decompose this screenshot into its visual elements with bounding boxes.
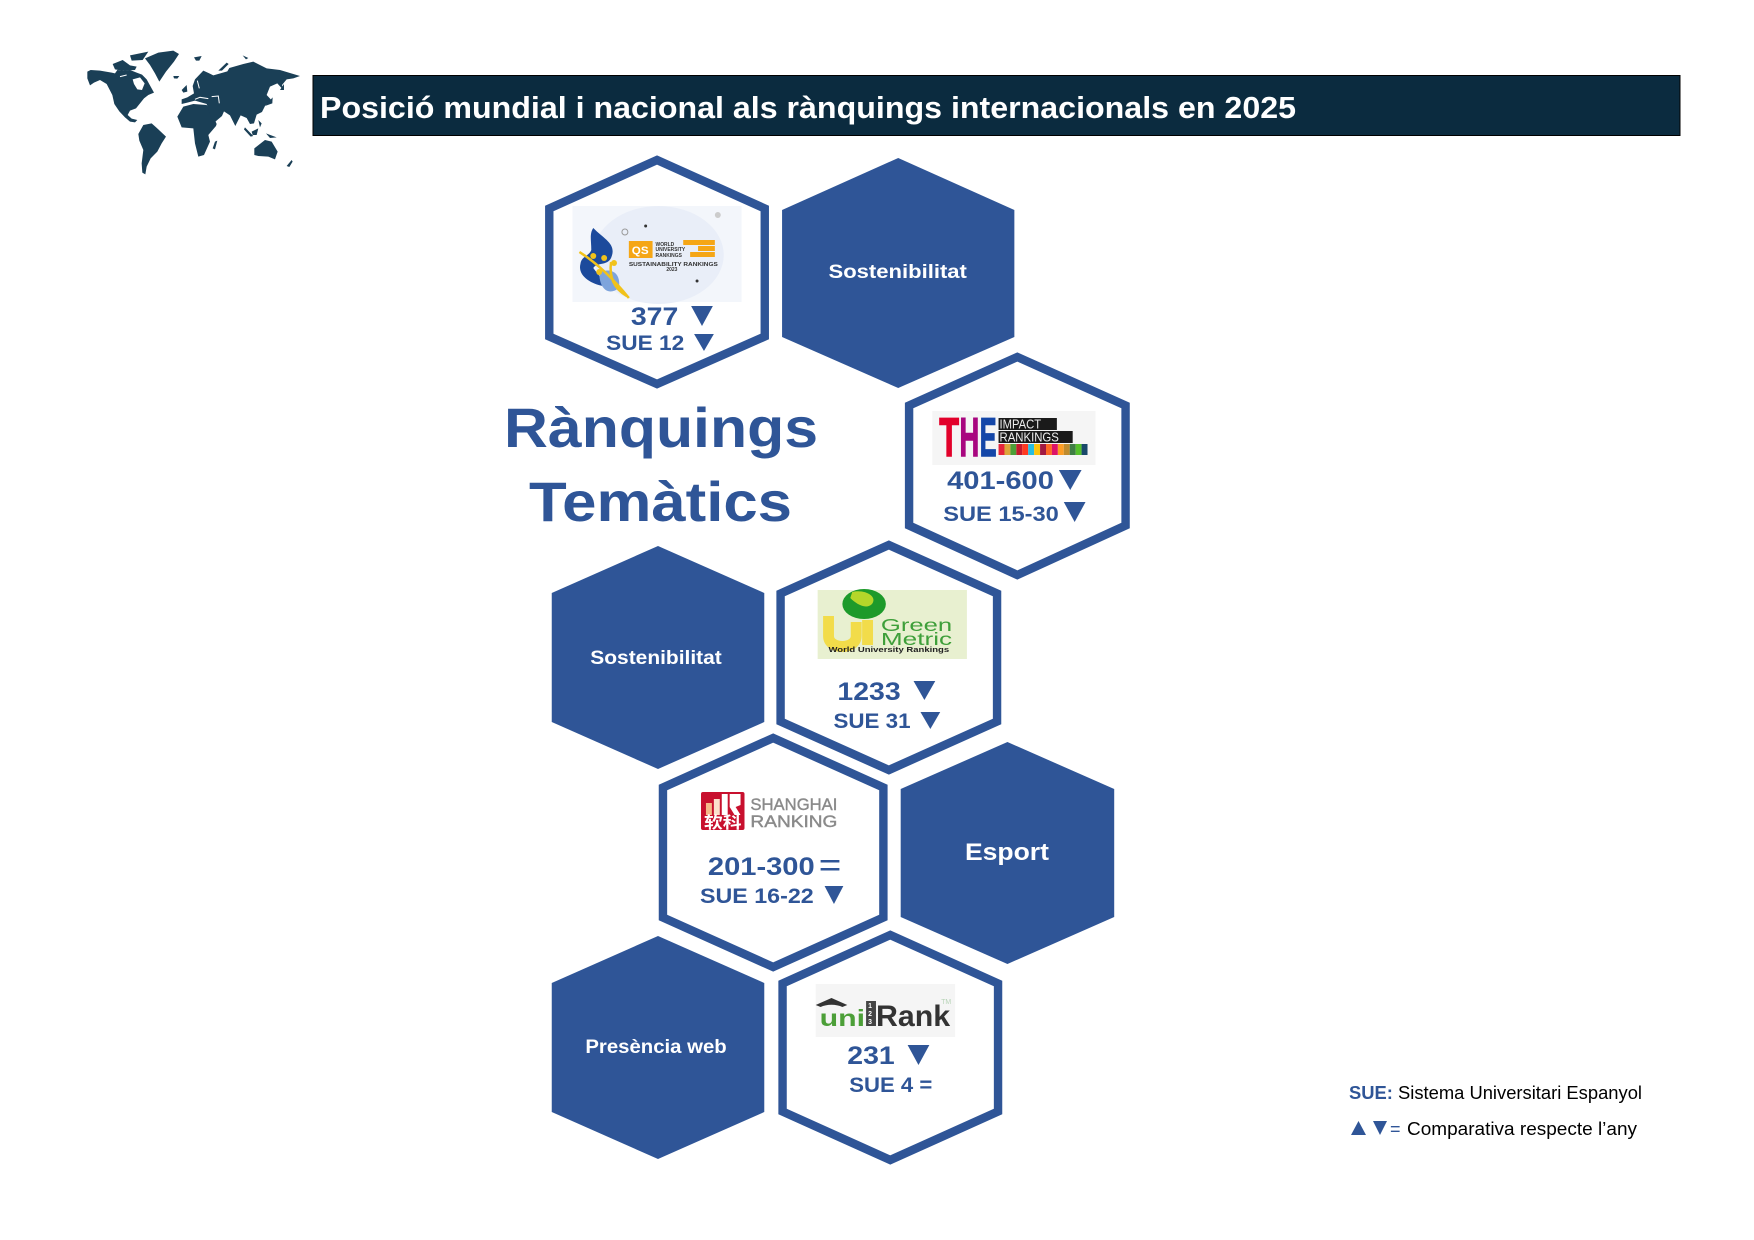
rank: 377: 377 xyxy=(631,304,678,331)
logo: QS World University Rankings: RANKINGS xyxy=(656,253,683,259)
rank: SUE 4 =: SUE 4 = xyxy=(849,1074,932,1097)
logo: Shanghai Ranking: RANKING xyxy=(750,812,837,831)
logo: THE Impact Rankings: IMPACT xyxy=(1000,416,1041,432)
panel: uniRank ranking xyxy=(783,935,998,1160)
logo: Shanghai Ranking xyxy=(701,792,837,832)
rank: 401-600: 401-600 xyxy=(947,468,1054,495)
legend: comparison symbols: = xyxy=(1390,1119,1401,1139)
heading: Rànquings Temàtics: Temàtics xyxy=(529,470,792,533)
title bar: Posició mundial i nacional als rànquings internacionals en 2025 xyxy=(320,90,1296,125)
panel: Esport label xyxy=(901,742,1114,964)
logo: Shanghai Ranking: 软科 xyxy=(704,814,742,832)
panel: Presència web label: Presència web xyxy=(585,1037,727,1058)
logo: QS World University Rankings: SUSTAINABILITY RANKINGS xyxy=(629,262,718,268)
logo: UI GreenMetric xyxy=(818,589,967,659)
rank: 231: 231 xyxy=(847,1043,895,1070)
logo: Shanghai Ranking: SHANGHAI xyxy=(750,795,837,814)
logo: QS World University Rankings: QS xyxy=(632,245,649,257)
panel: Shanghai ranking xyxy=(663,738,883,967)
logo: UI GreenMetric: Green xyxy=(881,615,952,635)
logo: uniRank: uni xyxy=(820,1005,865,1031)
hexagon panels xyxy=(549,158,1126,1160)
rank: SUE 16-22: SUE 16-22 xyxy=(700,885,814,908)
logo: THE Impact Rankings: H xyxy=(960,406,979,468)
arrow: down xyxy=(1059,470,1082,490)
panel: QS Sustainability ranking xyxy=(549,160,765,384)
rank: SUE 31: SUE 31 xyxy=(833,710,911,733)
panel: UI GreenMetric ranking xyxy=(781,545,997,770)
logo: uniRank: 2 xyxy=(868,1011,872,1018)
arrow: down xyxy=(920,712,940,729)
title bar xyxy=(313,76,1680,136)
logo: THE Impact Rankings: RANKINGS xyxy=(1000,429,1059,445)
panel: Sostenibilitat label 1: Sostenibilitat xyxy=(829,261,968,283)
logo: QS World University Rankings: UNIVERSITY xyxy=(656,247,686,253)
logo: UI GreenMetric: Metric xyxy=(881,629,952,649)
arrow: down xyxy=(914,681,935,700)
heading: Rànquings Temàtics: Rànquings xyxy=(504,396,818,459)
panel: Sostenibilitat label 1 xyxy=(782,158,1014,388)
logo: uniRank: TM xyxy=(941,999,951,1006)
panel: THE Impact ranking xyxy=(909,357,1126,575)
logo: THE Impact Rankings: E xyxy=(980,406,997,468)
symbol: equal xyxy=(821,860,839,870)
logo: uniRank: 1 xyxy=(868,1003,872,1010)
logo: uniRank xyxy=(816,984,955,1037)
arrow: down xyxy=(691,306,713,326)
panel: Sostenibilitat label 2 xyxy=(552,546,764,769)
logo: QS World University Rankings: WORLD xyxy=(656,242,675,248)
panel: Esport label: Esport xyxy=(965,839,1049,866)
rank: SUE 15-30: SUE 15-30 xyxy=(943,503,1059,526)
arrow: down xyxy=(694,334,714,351)
legend: SUE definition: SUE: Sistema Universitari Espanyol xyxy=(1349,1083,1642,1103)
logo: QS World University Rankings xyxy=(573,206,742,304)
panel: Sostenibilitat label 2: Sostenibilitat xyxy=(590,648,723,669)
arrow: down xyxy=(1064,502,1086,522)
panel: Presència web label xyxy=(552,936,764,1159)
logo: THE Impact Rankings: T xyxy=(939,406,959,468)
icon: world map xyxy=(87,51,300,174)
legend: comparison symbols: Comparativa respecte l’any xyxy=(1407,1119,1637,1139)
rank: SUE 12: SUE 12 xyxy=(606,332,684,355)
logo: THE Impact Rankings xyxy=(932,406,1095,468)
legend xyxy=(1349,1083,1642,1139)
arrow: down xyxy=(825,886,843,904)
logo: uniRank: Rank xyxy=(876,1000,951,1033)
heading: Rànquings Temàtics xyxy=(504,396,818,533)
rank: 1233: 1233 xyxy=(837,679,901,706)
logo: QS World University Rankings: 2023 xyxy=(666,267,678,273)
rank: 201-300: 201-300 xyxy=(708,854,815,881)
logo: uniRank: 3 xyxy=(868,1019,872,1026)
arrow: down xyxy=(908,1045,929,1065)
logo: UI GreenMetric: World University Rankings xyxy=(829,647,949,654)
